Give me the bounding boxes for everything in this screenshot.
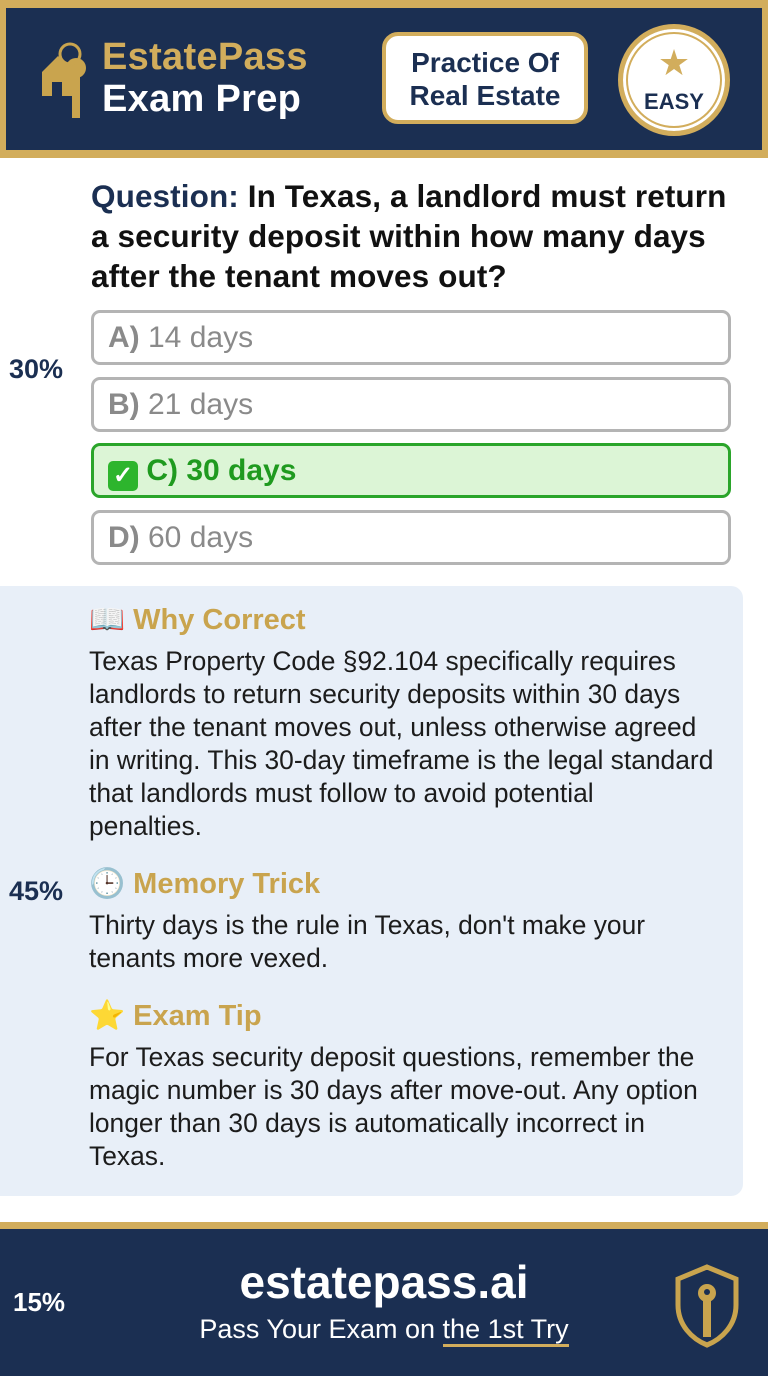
badge: easy xyxy=(618,24,730,136)
text: exam tip: longer than 30 days is automatically incorrect in xyxy=(89,1108,645,1138)
tagline: Pass Your Exam on the 1st Try xyxy=(199,1314,569,1344)
text: why correct: Texas Property Code §92.104 specifically requires xyxy=(89,646,676,676)
text: why correct: that landlords must follow to avoid potential xyxy=(89,778,594,808)
question: a security deposit within how many days xyxy=(91,218,706,254)
logo text: Exam Prep xyxy=(102,78,301,120)
text: why correct: penalties. xyxy=(89,811,202,841)
footer xyxy=(0,1222,768,1376)
option B: B) 21 days xyxy=(108,388,253,421)
text: exam tip: magic number is 30 days after move-out. Any option xyxy=(89,1075,698,1105)
text: why correct: in writing. This 30-day timeframe is the legal standard xyxy=(89,745,713,775)
question: after the tenant moves out? xyxy=(91,258,507,294)
text: memory trick: tenants more vexed. xyxy=(89,943,328,973)
stat 30%: 30% xyxy=(9,354,63,384)
badge: Practice Of Real Estate xyxy=(382,32,588,124)
logo text xyxy=(102,36,308,120)
question: Question: In Texas, a landlord must return xyxy=(91,178,726,214)
text: why correct: after the tenant moves out, unless otherwise agreed xyxy=(89,712,696,742)
site name: estatepass.ai xyxy=(240,1256,528,1308)
header xyxy=(0,0,768,158)
option D xyxy=(91,510,731,565)
question xyxy=(91,178,726,294)
badge: Practice Of Real Estate: Real Estate xyxy=(410,80,560,111)
icon: shield key xyxy=(676,1264,738,1348)
badge: easy: EASY xyxy=(644,89,704,114)
badge: easy: ★ xyxy=(658,42,690,83)
logo text: EstatePass xyxy=(102,36,308,78)
explanation panel xyxy=(0,586,743,1196)
text: why correct: landlords to return security deposits within 30 days xyxy=(89,679,680,709)
text: why correct xyxy=(89,646,713,841)
text: exam tip: Texas. xyxy=(89,1141,165,1171)
text: exam tip xyxy=(89,1042,698,1171)
option C correct xyxy=(91,443,731,498)
text: memory trick: Thirty days is the rule in Texas, don't make your xyxy=(89,910,645,940)
stat 15%: 15% xyxy=(13,1287,65,1317)
option A: A) 14 days xyxy=(108,321,253,354)
option C correct: ✓ xyxy=(113,462,133,489)
heading: memory trick: 🕒 Memory Trick xyxy=(89,868,320,900)
heading: exam tip: ⭐ Exam Tip xyxy=(89,1000,262,1032)
heading: why correct: 📖 Why Correct xyxy=(89,604,306,636)
option C correct: C) 30 days xyxy=(146,454,296,487)
option D: D) 60 days xyxy=(108,521,253,554)
text: memory trick xyxy=(89,910,645,973)
icon: house key xyxy=(42,42,86,118)
stat 45%: 45% xyxy=(9,876,63,906)
text: exam tip: For Texas security deposit questions, remember the xyxy=(89,1042,694,1072)
badge: Practice Of Real Estate: Practice Of xyxy=(411,47,559,78)
option B xyxy=(91,377,731,432)
option A xyxy=(91,310,731,365)
